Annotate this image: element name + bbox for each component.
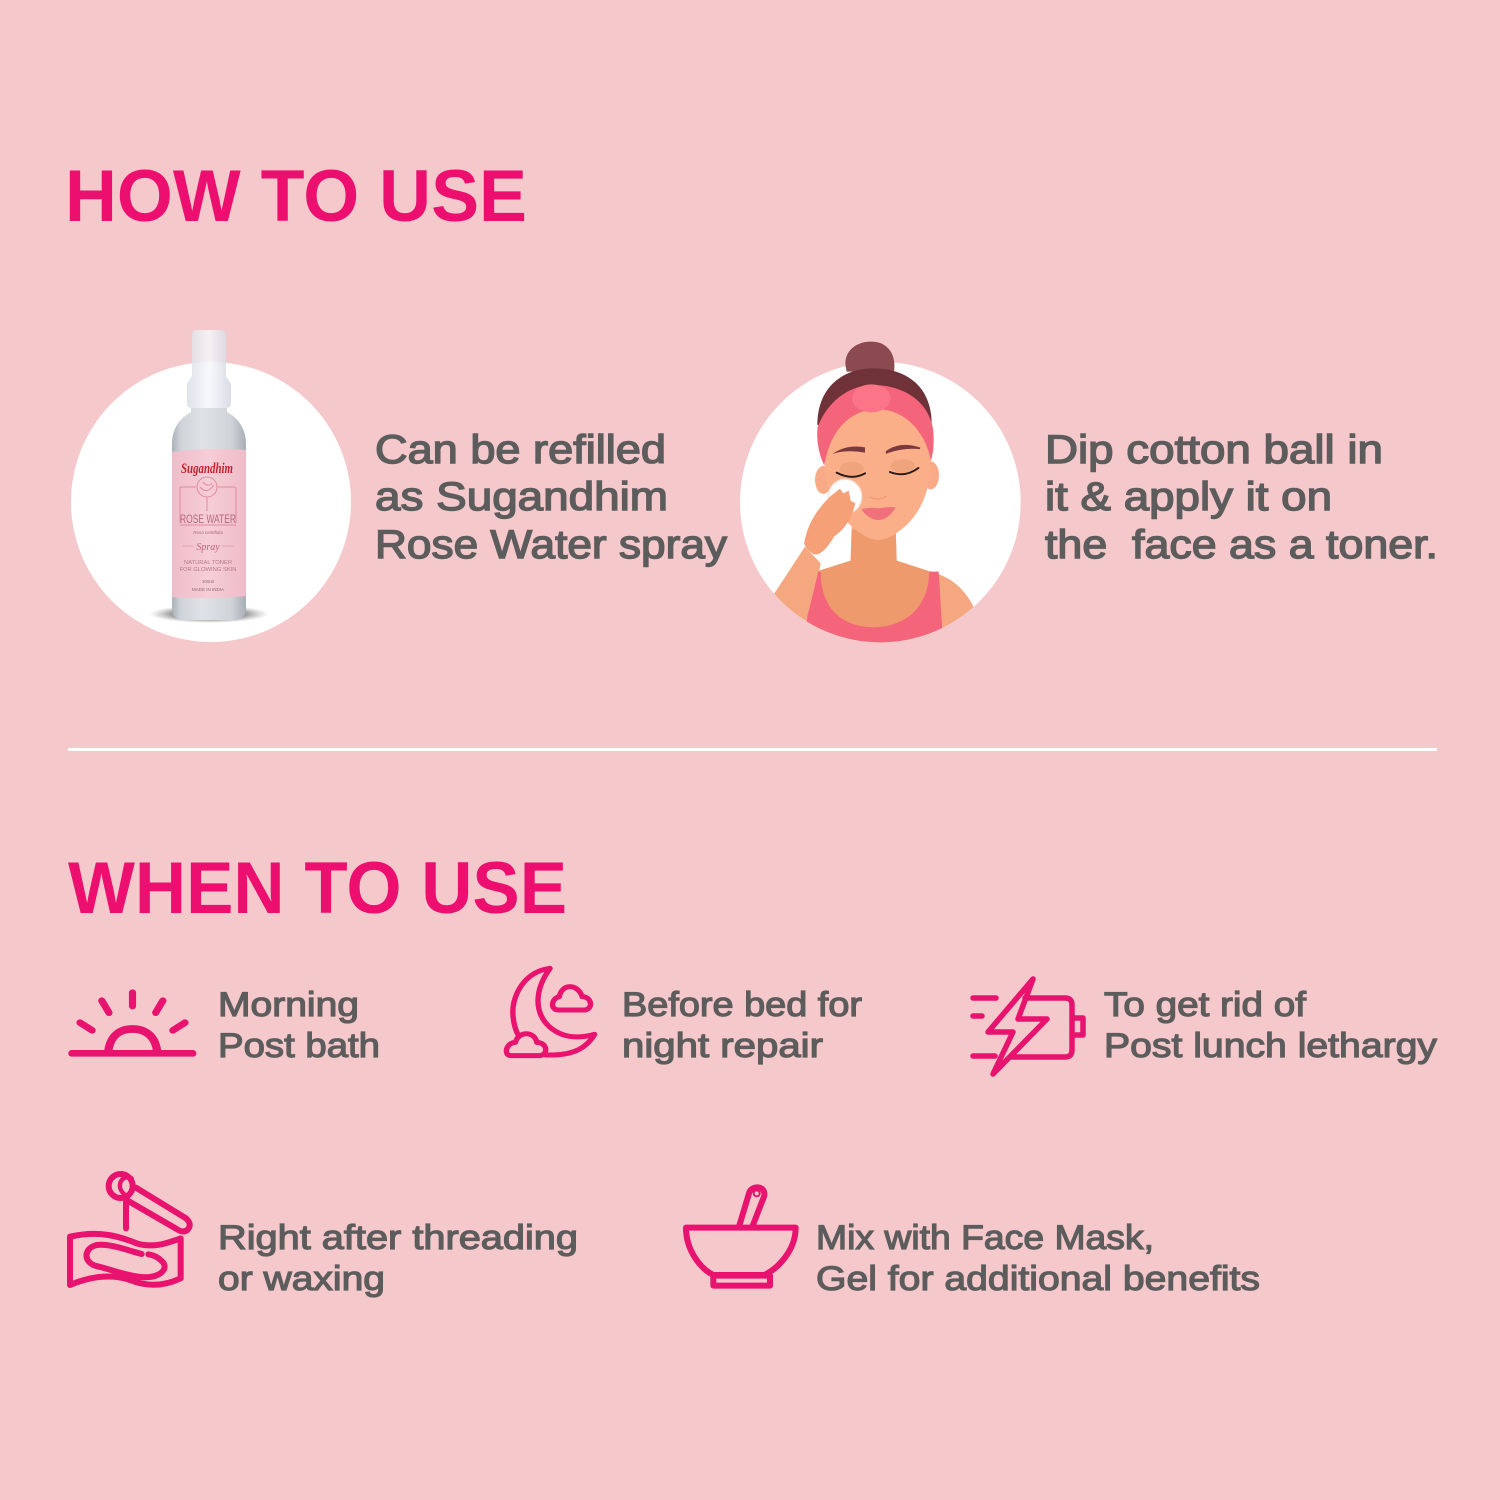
bottle label: NATURAL TONER	[184, 560, 232, 566]
bottle label: Spray	[196, 542, 220, 553]
lips	[861, 507, 896, 520]
text: face mask: Mix with Face Mask,	[816, 1219, 1154, 1257]
heading: when to use: WHEN TO USE	[68, 848, 567, 929]
text: refill instruction	[375, 428, 727, 567]
text: before bed	[622, 986, 862, 1065]
text: threading	[218, 1219, 578, 1298]
text: refill instruction: Can be refilled	[375, 428, 666, 472]
text: face mask: Gel for additional benefits	[816, 1260, 1260, 1298]
bottle label: Rosa centifolia	[193, 530, 223, 535]
text: post lunch	[1104, 986, 1437, 1065]
bottle label	[172, 449, 246, 598]
woman torso	[773, 527, 975, 647]
bottle label: 100ml	[202, 579, 214, 584]
text: threading: Right after threading	[218, 1219, 578, 1257]
text: morning	[218, 986, 380, 1065]
spray collar	[187, 376, 231, 408]
bottle label: Sugandhim	[181, 461, 233, 477]
bottle label: FOR GLOWING SKIN	[179, 567, 237, 573]
neck and chest	[810, 530, 938, 630]
nose	[869, 496, 887, 499]
text: application instruction: Dip cotton ball in	[1045, 428, 1383, 472]
text: morning: Post bath	[218, 1027, 380, 1065]
cotton pad	[828, 479, 862, 514]
text: face mask	[816, 1219, 1260, 1298]
headband	[817, 385, 934, 466]
eyelids	[840, 462, 864, 475]
text: threading: or waxing	[218, 1260, 385, 1298]
bottle shadow	[149, 605, 269, 623]
text: before bed: night repair	[622, 1027, 823, 1065]
hair	[817, 368, 932, 425]
eyelashes	[837, 468, 918, 477]
text: application instruction	[1045, 428, 1438, 567]
hair bun	[845, 342, 894, 372]
eyebrows	[832, 446, 865, 454]
ears	[815, 466, 832, 494]
icon: moon and clouds	[506, 968, 595, 1056]
panel: woman applying toner	[740, 342, 1021, 647]
panel: product bottle	[71, 330, 351, 642]
text: post lunch: To get rid of	[1104, 986, 1307, 1024]
text: application instruction: the face as a toner.	[1045, 523, 1438, 567]
icon: bowl	[686, 1187, 796, 1286]
hand	[804, 489, 855, 554]
bottle label: MADE IN INDIA	[192, 587, 224, 592]
icon: waxing	[70, 1174, 190, 1285]
icon: battery bolt	[973, 979, 1083, 1074]
text: refill instruction: Rose Water spray	[375, 523, 727, 567]
text: post lunch: Post lunch lethargy	[1104, 1027, 1437, 1065]
icon: sunrise	[72, 993, 193, 1053]
face	[825, 405, 931, 540]
text: morning: Morning	[218, 986, 359, 1024]
text: before bed: Before bed for	[622, 986, 862, 1024]
bottle label: ROSE WATER	[180, 514, 236, 526]
tank top	[805, 572, 943, 647]
text: application instruction: it & apply it on	[1045, 475, 1332, 519]
spray nozzle	[192, 330, 226, 378]
text: refill instruction: as Sugandhim	[375, 475, 668, 519]
bottle body	[172, 407, 246, 620]
heading: how to use: HOW TO USE	[65, 156, 527, 237]
